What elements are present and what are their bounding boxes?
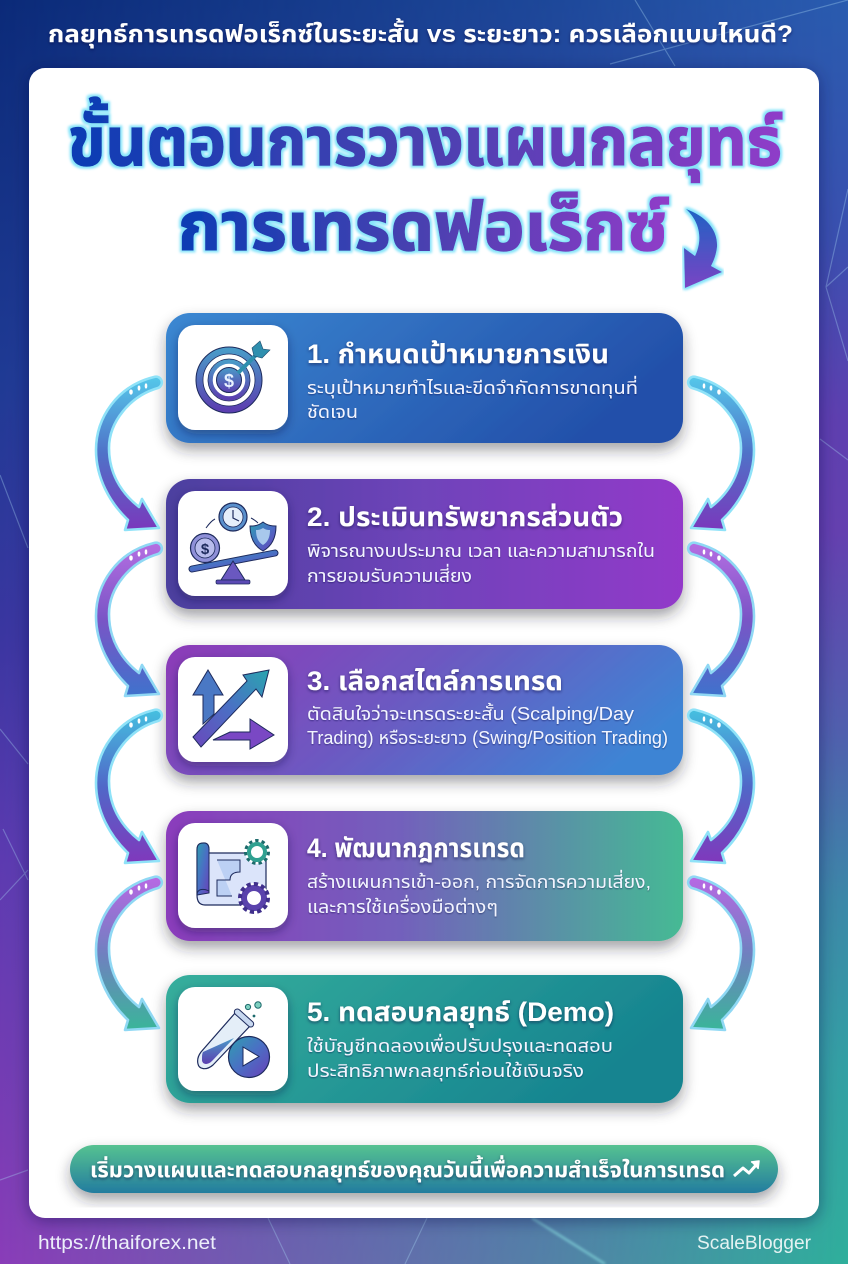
icon: scale with clock, coin and shield: $ (201, 541, 210, 558)
card 1 (166, 313, 683, 443)
icon: scale with clock, coin and shield (178, 491, 288, 596)
arrow: left 4 to 5 (96, 877, 162, 1030)
card 5 (166, 975, 683, 1103)
icon: three direction arrows (178, 657, 288, 762)
text block: ประสิทธิภาพกลยุทธ์ก่อนใช้เงินจริง (307, 1061, 584, 1082)
text block (307, 375, 638, 422)
icon: trend up (734, 1161, 759, 1176)
main heading (68, 96, 782, 265)
card 3 (166, 645, 683, 775)
call to action bar (70, 1145, 778, 1193)
footer: brand: ScaleBlogger (697, 1233, 812, 1254)
footer: website: https://thaiforex.net (38, 1233, 217, 1254)
arrow: right 3 to 4 (688, 710, 754, 863)
heading: 1. กำหนดเป้าหมายการเงิน (307, 339, 609, 369)
text block: และการใช้เครื่องมือต่างๆ (307, 894, 498, 917)
arrow: left 2 to 3 (96, 543, 162, 696)
heading: 3. เลือกสไตล์การเทรด (307, 666, 563, 696)
text block: สร้างแผนการเข้า-ออก, การจัดการความเสี่ยง, (307, 869, 651, 892)
text block: การยอมรับความเสี่ยง (307, 563, 472, 586)
text block: ตัดสินใจว่าจะเทรดระยะสั้น (Scalping/Day (307, 702, 634, 724)
arrow: right 4 to 5 (688, 877, 754, 1030)
heading: 5. ทดสอบกลยุทธ์ (Demo) (307, 997, 614, 1028)
heading: 4. พัฒนากฎการเทรด (307, 833, 525, 863)
icon: target with dollar: $ (224, 371, 234, 391)
text block (307, 702, 668, 748)
text block: ชัดเจน (307, 402, 358, 422)
icon: target with dollar (178, 325, 288, 430)
arrow: left 3 to 4 (96, 710, 162, 863)
text block: ใช้บัญชีทดลองเพื่อปรับปรุงและทดสอบ (307, 1033, 613, 1057)
arrow: left 1 to 2 (96, 377, 162, 530)
card 4 (166, 811, 683, 941)
heading: 2. ประเมินทรัพยากรส่วนตัว (307, 502, 623, 532)
icon: blueprint with gears (178, 823, 288, 928)
arrow: right 1 to 2 (688, 377, 754, 530)
icon: test tube with play button (178, 987, 288, 1091)
arrow: heading down arrow (684, 209, 722, 288)
text block: Trading) หรือระยะยาว (Swing/Position Trading) (307, 728, 668, 748)
header title: กลยุทธ์การเทรดฟอเร็กซ์ในระยะสั้น vs ระยะยาว: ควรเลือกแบบไหนดี? (48, 18, 793, 49)
text block: ระบุเป้าหมายทำไรและขีดจำกัดการขาดทุนที่ (307, 375, 638, 399)
arrow: right 2 to 3 (688, 543, 754, 696)
text block (307, 1033, 613, 1082)
text block: พิจารณางบประมาณ เวลา และความสามารถใน (307, 541, 655, 561)
main heading: ขั้นตอนการวางแผนกลยุทธ์ (68, 96, 782, 183)
call to action bar: เริ่มวางแผนและทดสอบกลยุทธ์ของคุณวันนี้เพื่อความสำเร็จในการเทรด (90, 1155, 725, 1183)
card 2 (166, 479, 683, 609)
text block (307, 541, 655, 586)
text block (307, 869, 651, 917)
main heading: การเทรดฟอเร็กซ์ (178, 189, 669, 265)
